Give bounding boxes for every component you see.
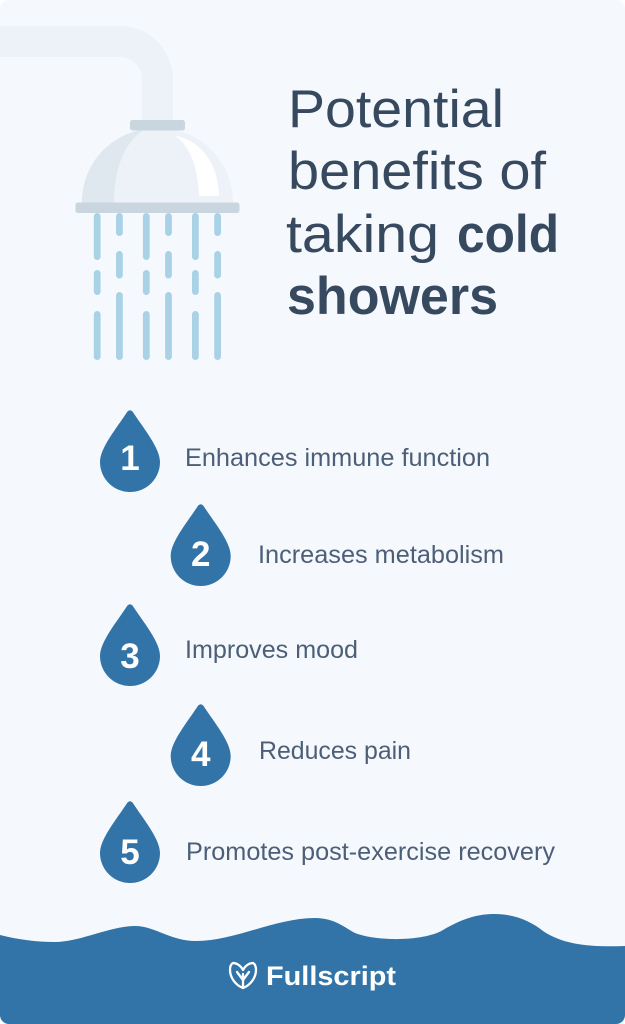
dome highlight	[175, 136, 219, 196]
benefit 3	[100, 604, 358, 686]
logo: Fullscript	[230, 961, 396, 991]
shower collar	[130, 120, 185, 130]
icon: drop 5	[100, 801, 160, 883]
icon: drop 3	[100, 604, 160, 686]
title: cold	[457, 205, 559, 264]
benefit 1	[100, 410, 490, 492]
benefit text 3: Improves mood	[185, 636, 358, 664]
shower pipe	[0, 42, 158, 122]
title: benefits of	[288, 142, 546, 201]
number 4: 4	[191, 735, 211, 774]
number 1: 1	[120, 439, 140, 478]
water streams	[94, 213, 221, 360]
benefit text 4: Reduces pain	[259, 737, 411, 765]
title: Potential	[288, 80, 504, 139]
icon: drop 2	[171, 504, 231, 586]
icon: leaf logo	[230, 963, 256, 988]
icon: drop 1	[100, 410, 160, 492]
shower dome	[82, 130, 233, 203]
number 5: 5	[120, 833, 140, 872]
benefit text 5: Promotes post-exercise recovery	[186, 838, 556, 866]
dome shadow	[82, 130, 144, 203]
title	[286, 80, 559, 326]
footer wave	[0, 914, 625, 1024]
number 2: 2	[191, 535, 210, 574]
icon: shower head	[0, 42, 240, 360]
benefit 5	[100, 801, 556, 883]
benefit text 2: Increases metabolism	[258, 541, 504, 569]
title: showers	[287, 267, 498, 326]
shower plate	[76, 202, 240, 213]
benefit text 1: Enhances immune function	[185, 444, 490, 472]
wordmark: Fullscript	[266, 961, 396, 991]
title: taking	[286, 205, 439, 264]
icon: drop 4	[171, 704, 231, 786]
number 3: 3	[120, 637, 140, 676]
benefit 4	[171, 704, 411, 786]
benefit 2	[171, 504, 504, 586]
